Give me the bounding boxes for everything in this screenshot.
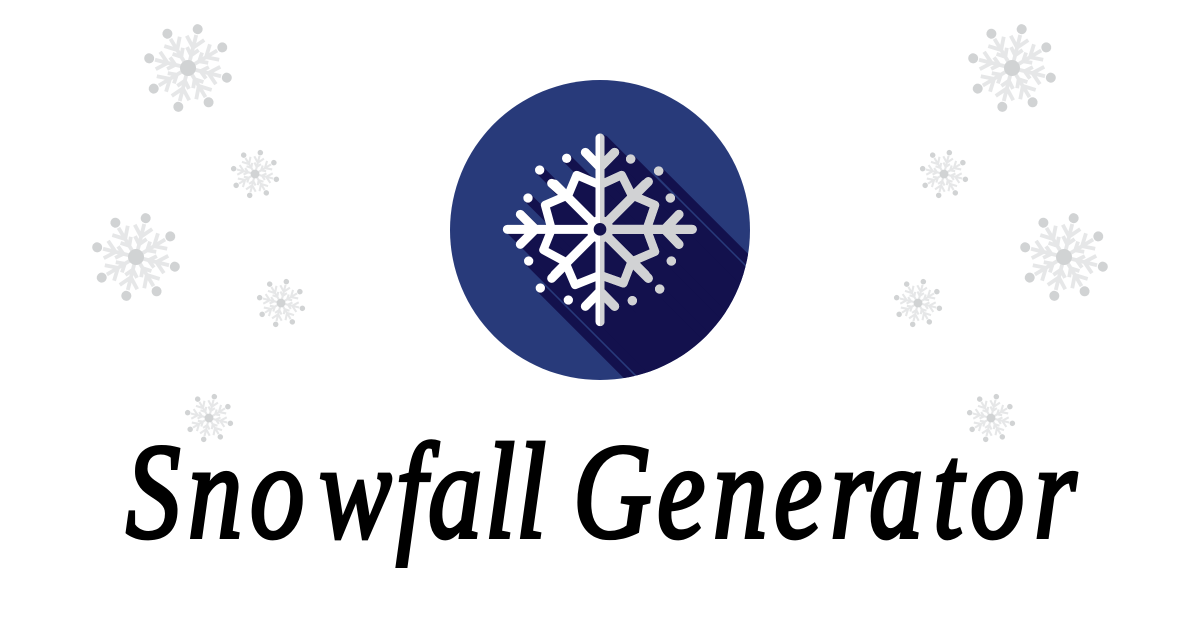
background snowflake: lower right small xyxy=(893,278,943,328)
icon: snowflake badge xyxy=(450,80,750,380)
background snowflake: bottom left small xyxy=(184,393,234,443)
background snowflake: upper left small xyxy=(230,149,280,199)
background snowflake: middle left large xyxy=(90,211,182,303)
background snowflake: top right large xyxy=(966,22,1058,114)
background snowflake: upper right small xyxy=(919,149,969,199)
background snowflake: lower left small xyxy=(256,278,306,328)
background snowflake: middle right large xyxy=(1018,211,1110,303)
title: Snowfall Generator xyxy=(126,416,1077,567)
background snowflake: bottom right small xyxy=(966,393,1016,443)
background snowflake: top left large xyxy=(142,22,234,114)
